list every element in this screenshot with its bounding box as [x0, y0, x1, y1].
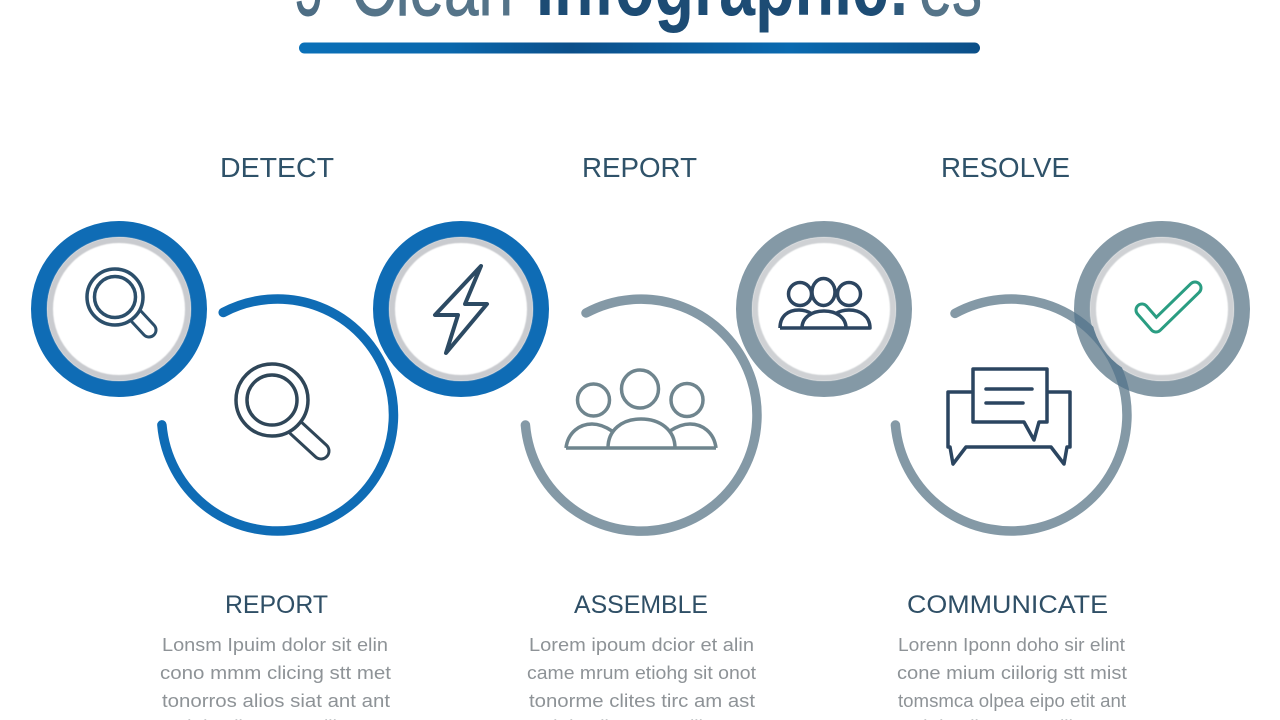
icon: small team — [780, 278, 870, 328]
text block: communicate: cone mium ciilorig stt mist — [897, 663, 1127, 683]
text block: assemble: ASSEMBLE — [574, 591, 708, 619]
text block: assemble: tonorme clites tirc am ast — [529, 691, 755, 711]
small ring: team — [744, 229, 904, 389]
icon: check mark — [1142, 288, 1195, 326]
icon: small magnifier — [87, 269, 149, 330]
text block: communicate: Lorenn Iponn doho sir elint — [898, 635, 1125, 655]
title — [295, 0, 982, 33]
text block: assemble: came mrum etiohg sit onot — [527, 663, 756, 683]
text block: communicate: tomsmca olpea eipo etit ant — [898, 691, 1126, 711]
small ring: check — [1074, 221, 1250, 397]
large arc ring: assemble step — [525, 299, 757, 531]
text block: report: REPORT — [225, 591, 328, 619]
overlap of large arc on ring — [1074, 312, 1130, 390]
heading: resolve: RESOLVE — [941, 152, 1070, 183]
text block: report: cono mmm clicing stt met — [160, 663, 391, 683]
text block: report: tonorros alios siat ant ant — [162, 691, 390, 711]
heading: report: REPORT — [582, 152, 697, 183]
small ring: search — [39, 229, 199, 389]
icon: lightning bolt — [435, 266, 487, 353]
small ring: bolt — [381, 229, 541, 389]
text block: assemble — [527, 591, 756, 720]
title underline bar — [299, 42, 980, 54]
text block: communicate: COMMUNICATE — [907, 591, 1108, 619]
text block: report — [160, 591, 391, 720]
icon: large team — [566, 370, 716, 448]
icon: chat bubbles — [948, 369, 1070, 464]
text block: assemble: Lorem ipoum dcior et alin — [529, 635, 754, 655]
text block: communicate — [897, 591, 1127, 720]
heading: detect: DETECT — [220, 152, 334, 183]
icon: large magnifier — [236, 364, 321, 451]
large arc ring: communicate step — [895, 299, 1127, 531]
large arc ring: report step — [162, 299, 393, 531]
text block: report: Lonsm Ipuim dolor sit elin — [162, 635, 388, 655]
